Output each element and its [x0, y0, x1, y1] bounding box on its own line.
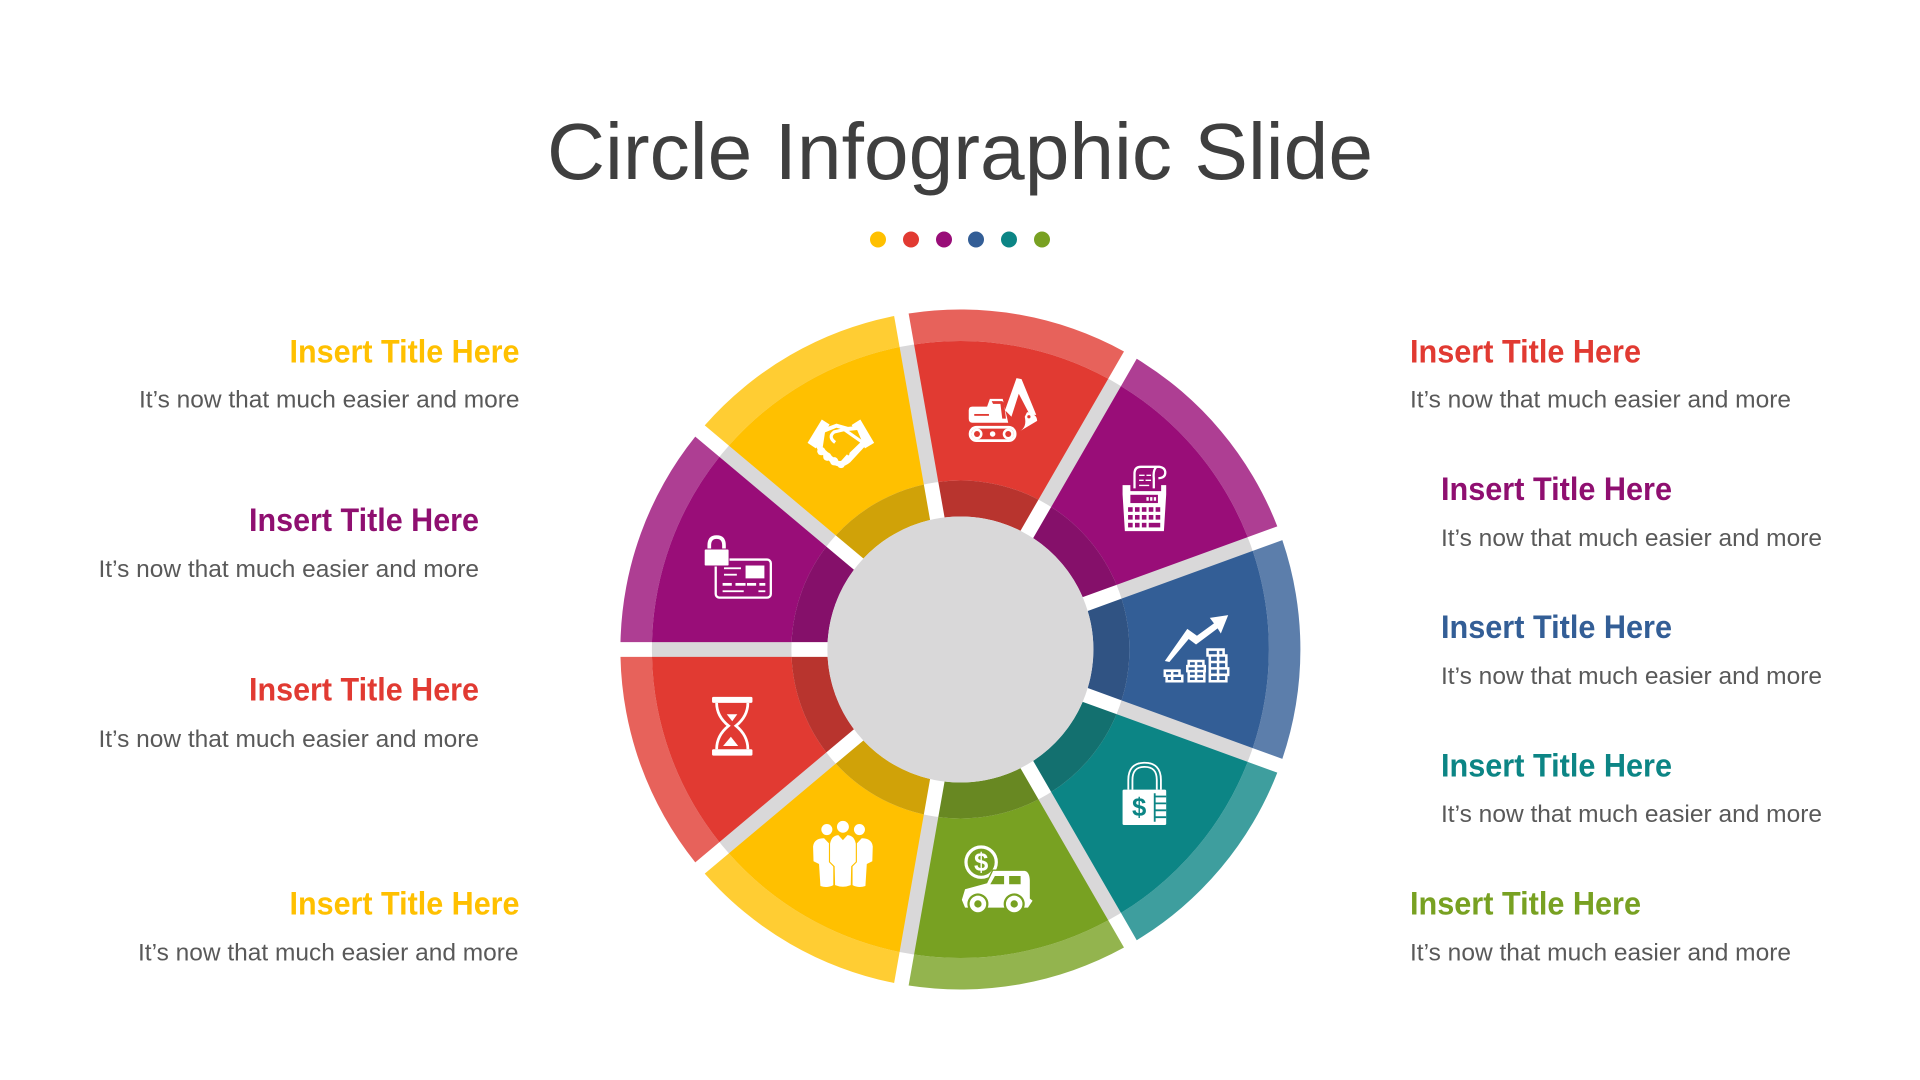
title: Circle Infographic Slide	[547, 107, 1373, 196]
text block: right 2 purple: It’s now that much easier and more	[1441, 525, 1822, 552]
text block: right 4 teal: Insert Title Here	[1441, 748, 1672, 784]
segment: blue growth	[1088, 540, 1300, 759]
text block: left 2 purple: It’s now that much easier and more	[98, 556, 479, 583]
text block: left 3 red: It’s now that much easier and more	[98, 726, 479, 753]
text block: left 2 purple	[98, 502, 479, 583]
segment: green car finance	[891, 766, 1127, 1003]
text block: right 3 blue: It’s now that much easier and more	[1441, 663, 1822, 690]
segment: purple left card security	[604, 430, 858, 687]
text block: right 1 red: It’s now that much easier and more	[1410, 386, 1791, 414]
text block: left 4 yellow: Insert Title Here	[290, 886, 520, 922]
text block: left 1 yellow: Insert Title Here	[290, 334, 520, 370]
segment: yellow team	[696, 734, 965, 999]
segment: teal security	[1021, 678, 1291, 952]
icon: padlock with dollar	[1123, 765, 1166, 825]
segment: purple right calculator	[1021, 347, 1291, 621]
text block: left 1 yellow	[139, 334, 520, 414]
segment: red excavator	[891, 296, 1127, 533]
icon: padlock with dollar: $	[1132, 794, 1146, 822]
icon: hourglass	[712, 697, 752, 756]
text block: right 1 red: Insert Title Here	[1410, 334, 1641, 370]
segment: red hourglass	[604, 612, 858, 869]
text block: right 5 green	[1410, 886, 1791, 966]
text block: left 2 purple: Insert Title Here	[249, 502, 479, 538]
text block: right 2 purple: Insert Title Here	[1441, 471, 1672, 507]
icon: handshake	[808, 419, 874, 468]
text block: right 3 blue	[1441, 609, 1822, 690]
icon: locked credit card	[705, 537, 771, 598]
text block: right 4 teal	[1441, 748, 1822, 828]
icon: rising arrow over coin stacks	[1165, 615, 1228, 681]
text block: left 3 red	[98, 672, 479, 753]
text block: right 3 blue: Insert Title Here	[1441, 609, 1672, 645]
text block: left 1 yellow: It’s now that much easier and more	[139, 386, 520, 414]
segment: yellow handshake	[696, 300, 965, 565]
icon: car with dollar coin	[962, 847, 1033, 915]
text block: left 4 yellow: It’s now that much easier and more	[138, 940, 518, 966]
text block: right 5 green: It’s now that much easier and more	[1410, 940, 1791, 966]
icon: three people	[813, 821, 873, 887]
icon: excavator	[969, 378, 1037, 442]
text block: left 4 yellow	[138, 886, 520, 966]
icon: printing calculator	[1123, 467, 1166, 531]
text block: right 4 teal: It’s now that much easier and more	[1441, 801, 1822, 828]
centre circle	[827, 516, 1093, 782]
text block: left 3 red: Insert Title Here	[249, 672, 479, 708]
title colour dots	[870, 232, 1050, 248]
text block: right 2 purple	[1441, 471, 1822, 552]
icon: car with dollar coin: $	[974, 849, 988, 877]
text block: right 1 red	[1410, 334, 1791, 414]
text block: right 5 green: Insert Title Here	[1410, 886, 1641, 922]
